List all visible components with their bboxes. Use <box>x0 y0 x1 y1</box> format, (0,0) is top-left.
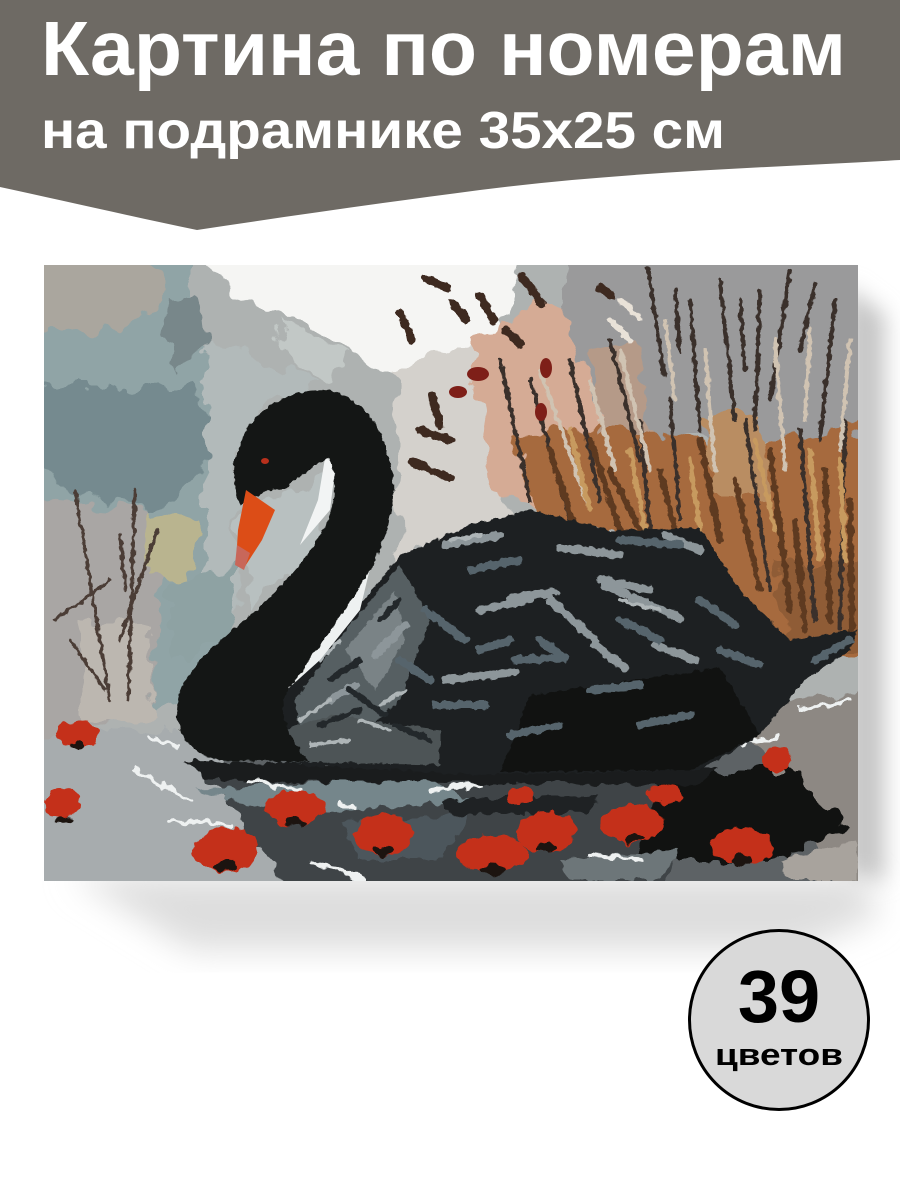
header banner <box>0 0 900 230</box>
beak <box>236 490 275 568</box>
eye <box>261 458 269 464</box>
white neck highlight <box>288 570 370 688</box>
subtitle: на подрамнике 35х25 см <box>41 102 725 160</box>
badge: 39 colours <box>690 930 868 1110</box>
swan neck and head <box>177 390 393 762</box>
canvas shadow <box>70 285 885 950</box>
swan <box>177 390 858 775</box>
badge number: 39 <box>738 955 820 1038</box>
left branches <box>52 488 160 702</box>
painting background <box>44 265 858 742</box>
poppies <box>44 720 791 875</box>
swan body <box>250 510 858 775</box>
reeds mass <box>395 265 858 658</box>
badge label: цветов <box>715 1037 843 1072</box>
painting <box>44 265 858 881</box>
title: Картина по номерам <box>41 6 846 92</box>
reed tips <box>400 276 612 478</box>
water <box>44 691 858 881</box>
